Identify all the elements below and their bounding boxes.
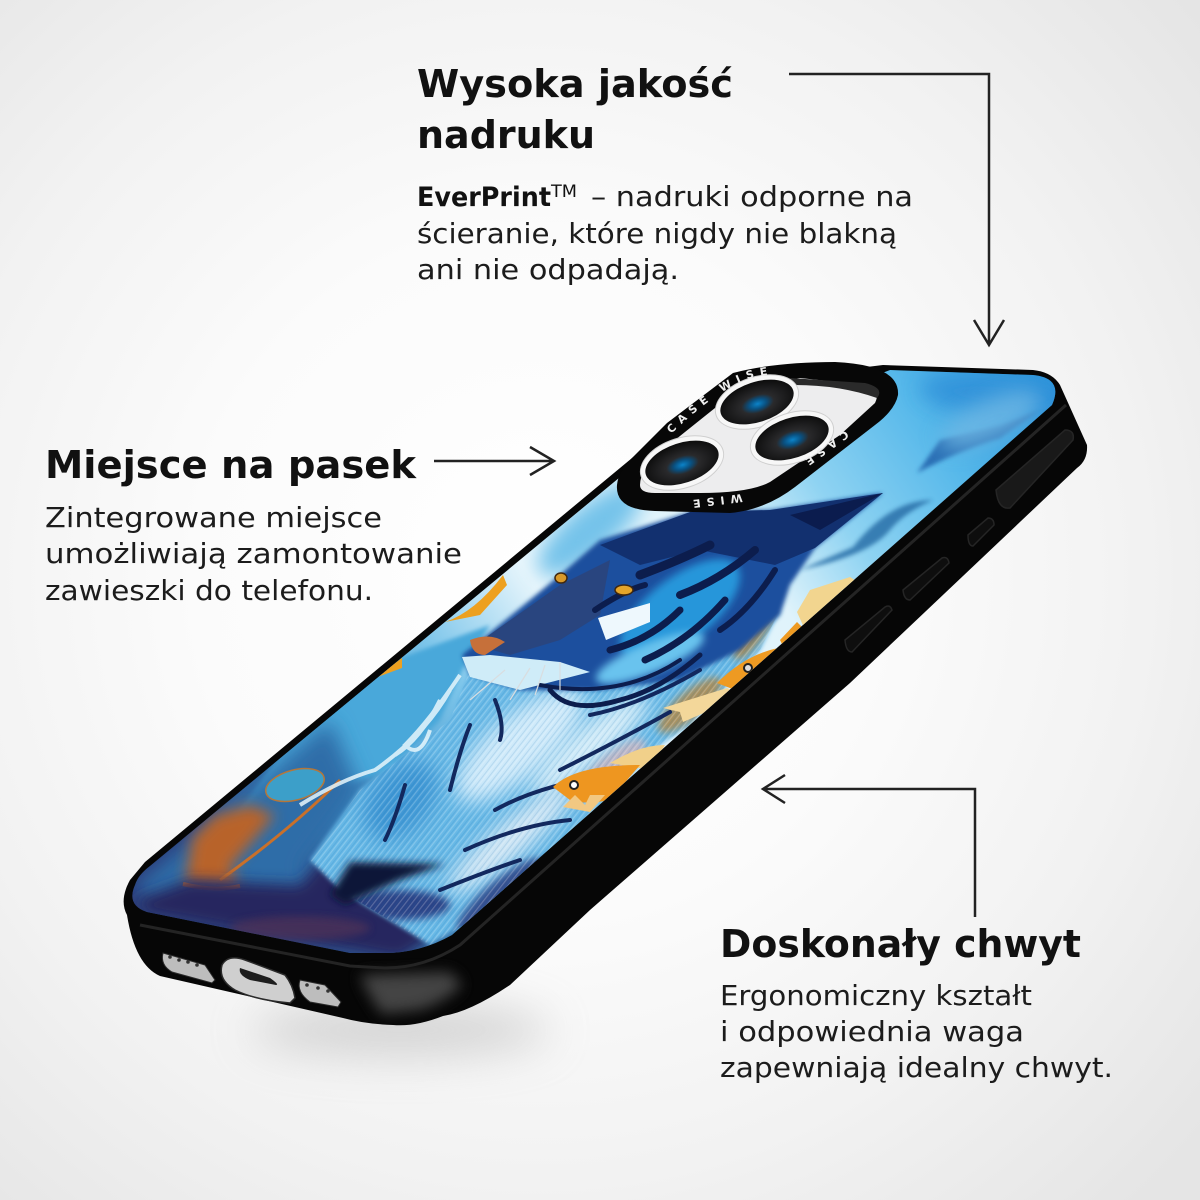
phone case xyxy=(124,362,1088,1026)
ring text: CASE xyxy=(806,432,848,466)
dark fold xyxy=(330,862,445,905)
text block: ani nie odpadają. xyxy=(417,253,679,286)
callout: strap slot xyxy=(45,443,462,607)
text block: umożliwiają zamontowanie xyxy=(45,537,462,570)
side rim line xyxy=(140,405,1066,968)
water hair xyxy=(300,675,460,805)
plate upper shadow xyxy=(790,378,879,398)
artwork xyxy=(132,370,1056,953)
tiger body xyxy=(308,612,780,946)
arrow: grip xyxy=(763,775,975,917)
ring text xyxy=(668,367,848,508)
arrow: print quality xyxy=(789,74,1004,345)
head dark bridge xyxy=(475,560,610,655)
arrow: strap slot xyxy=(434,447,554,475)
camera bump xyxy=(616,362,898,513)
lower blues xyxy=(132,717,365,946)
whiskers xyxy=(470,662,560,700)
text block: TM xyxy=(550,182,577,202)
text block: Ergonomiczny kształt xyxy=(720,979,1032,1012)
phone shadow xyxy=(250,1004,550,1056)
heading: Wysoka jakość xyxy=(417,62,733,106)
callout: print quality xyxy=(417,62,913,286)
body stripes xyxy=(385,670,700,890)
head stripes xyxy=(540,545,775,706)
eye whites xyxy=(598,603,650,640)
text block: EverPrint xyxy=(417,182,551,213)
text block: zawieszki do telefonu. xyxy=(45,574,373,607)
text block xyxy=(720,979,1113,1084)
text block: zapewniają idealny chwyt. xyxy=(720,1051,1113,1084)
heading xyxy=(417,62,733,157)
tiger eyes xyxy=(555,573,633,595)
text block: Zintegrowane miejsce xyxy=(45,501,382,534)
callout: grip xyxy=(720,922,1113,1084)
head cyan fur xyxy=(616,554,744,656)
muzzle xyxy=(462,655,590,690)
corner highlight xyxy=(360,972,462,1014)
water on the left xyxy=(248,624,491,801)
ring text: WISE xyxy=(694,494,743,508)
tiger head xyxy=(462,493,883,690)
goldfish large xyxy=(553,745,665,812)
side buttons xyxy=(845,430,1073,652)
lens right xyxy=(743,401,841,475)
heading: nadruku xyxy=(417,113,595,157)
head dark top xyxy=(600,493,883,565)
case body xyxy=(124,365,1087,1025)
bottom ports xyxy=(162,953,341,1007)
text block: ścieranie, które nigdy nie blakną xyxy=(417,217,897,250)
ring text: CASE WISE xyxy=(668,367,767,432)
heading: Miejsce na pasek xyxy=(45,443,417,487)
nose xyxy=(470,636,505,655)
text block: – nadruki odporne na xyxy=(591,180,913,213)
goldfish upper right xyxy=(780,577,854,644)
text block: i odpowiednia waga xyxy=(720,1015,1024,1048)
text block xyxy=(417,180,913,286)
lens top xyxy=(708,365,806,439)
heading: Doskonały chwyt xyxy=(720,922,1081,966)
lens left xyxy=(633,426,731,500)
text block xyxy=(45,501,462,607)
goldfish middle xyxy=(663,648,778,722)
sky wisps xyxy=(525,366,1082,590)
camera plate xyxy=(640,378,877,493)
goldfish near edge xyxy=(375,575,507,678)
navy base xyxy=(136,860,461,953)
orange cloud xyxy=(183,763,340,889)
